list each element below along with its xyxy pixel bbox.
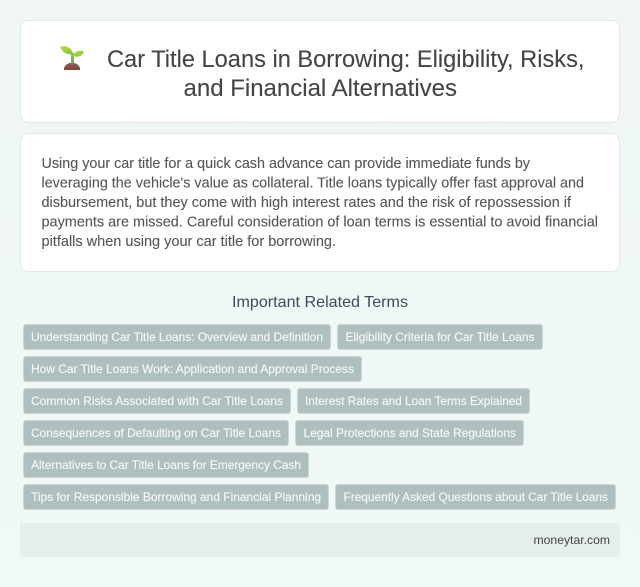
tag: legal protections: Legal Protections and State Regulations — [304, 426, 516, 440]
text block: summary: disbursement, but they come with high interest rates and the risk of repossession if — [42, 194, 572, 211]
title: and Financial Alternatives — [184, 75, 457, 102]
text block: summary: pitfalls when using your car title for borrowing. — [42, 233, 336, 250]
tag: eligibility — [338, 324, 542, 350]
tag: understanding — [24, 324, 330, 350]
text block: summary — [42, 155, 598, 250]
tag: interest rates — [298, 388, 530, 414]
tag group: related terms — [24, 324, 616, 510]
tag: interest rates: Interest Rates and Loan Terms Explained — [305, 394, 522, 408]
tag: faq — [336, 484, 616, 510]
tag: common risks — [24, 388, 290, 414]
text block: summary: leveraging the vehicle's value as collateral. Title loans typically offer fast approval and — [42, 174, 584, 192]
footer bar — [20, 523, 620, 557]
tag: common risks: Common Risks Associated with Car Title Loans — [31, 394, 283, 408]
tag: tips: Tips for Responsible Borrowing and Financial Planning — [31, 490, 321, 504]
footer text: site name: moneytar.com — [534, 533, 610, 547]
text block: summary: Using your car title for a quick cash advance can provide immediate funds by — [42, 155, 530, 172]
title — [107, 46, 584, 102]
tag: how it works: How Car Title Loans Work: Application and Approval Process — [31, 362, 354, 376]
tag: legal protections — [296, 420, 524, 446]
tag: alternatives — [24, 452, 308, 478]
text block: summary: payments are missed. Careful consideration of loan terms is essential to avoid financial — [42, 214, 598, 230]
tag: alternatives: Alternatives to Car Title Loans for Emergency Cash — [31, 458, 301, 472]
tag: defaulting — [24, 420, 288, 446]
icon: seedling — [60, 46, 84, 70]
panel: summary paragraph card — [20, 134, 620, 272]
tag: faq: Frequently Asked Questions about Car Title Loans — [344, 490, 608, 504]
tag: defaulting: Consequences of Defaulting on Car Title Loans — [31, 426, 281, 440]
tag: how it works — [24, 356, 362, 382]
tag: tips — [24, 484, 328, 510]
panel: title card — [20, 20, 620, 122]
heading: important related terms: Important Related Terms — [232, 294, 408, 311]
tag: eligibility: Eligibility Criteria for Car Title Loans — [346, 330, 534, 344]
tag: understanding: Understanding Car Title Loans: Overview and Definition — [31, 330, 323, 344]
title: Car Title Loans in Borrowing: Eligibility, Risks, — [107, 46, 584, 73]
